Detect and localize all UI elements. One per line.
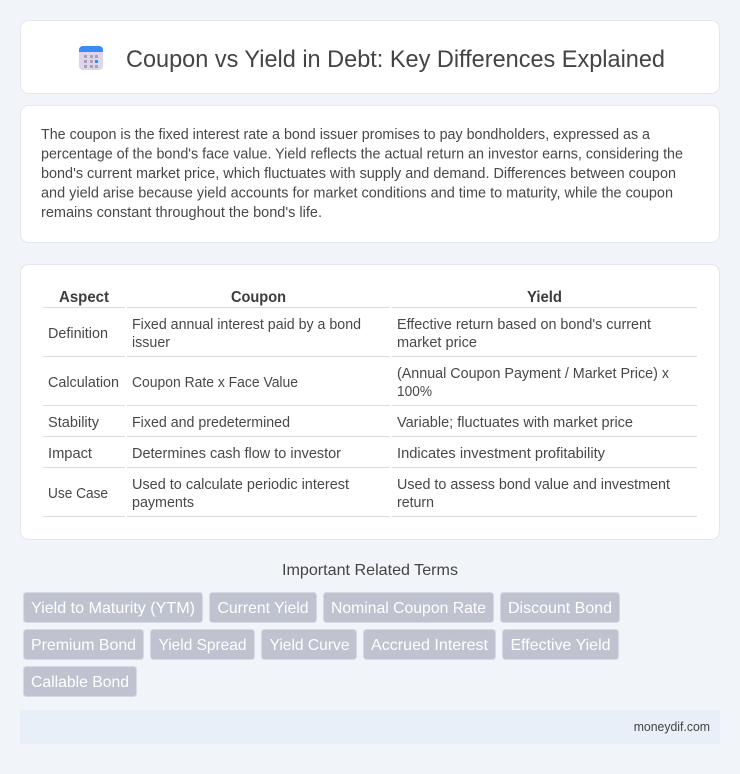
footer: moneydif.com xyxy=(634,719,710,734)
table row: stability xyxy=(43,415,697,437)
related term tags: Nominal Coupon Rate xyxy=(331,600,486,617)
text block: intro paragraph: percentage of the bond's face value. Yield reflects the actual return an investor earns, considering the xyxy=(41,146,683,162)
icon: calendar xyxy=(79,46,103,70)
table row: definition: issuer xyxy=(132,335,170,351)
text block: intro paragraph: remains constant throughout the bond's life. xyxy=(41,205,322,221)
table row: definition xyxy=(43,317,697,357)
table row: calculation xyxy=(43,366,697,406)
table row: use case xyxy=(43,477,697,517)
text block: intro paragraph: The coupon is the fixed interest rate a bond issuer promises to pay bondholders, expressed as a xyxy=(41,127,650,143)
table header: Aspect xyxy=(59,289,109,306)
related term tags: Yield to Maturity (YTM) xyxy=(31,600,195,617)
table header xyxy=(43,289,697,308)
table row: use case: return xyxy=(397,495,434,511)
table header: Yield xyxy=(527,289,562,306)
panel: intro text xyxy=(20,106,720,242)
text block: intro paragraph: bond's current market price, which fluctuates with supply and demand. Differences between coupon xyxy=(41,166,676,182)
table row: use case: Used to calculate periodic interest xyxy=(132,477,349,493)
panel: header xyxy=(20,20,720,94)
table row: calculation: Coupon Rate x Face Value xyxy=(132,375,298,391)
related term tags: Current Yield xyxy=(218,600,308,617)
table row: stability: Fixed and predetermined xyxy=(132,415,290,431)
table row: impact: Impact xyxy=(48,446,92,462)
related term tags: Accrued Interest xyxy=(371,637,489,654)
panel: comparison table xyxy=(20,264,720,540)
table header: Coupon xyxy=(231,289,286,306)
related term tags: Discount Bond xyxy=(508,600,612,617)
table row: impact: Determines cash flow to investor xyxy=(132,446,341,462)
related term tags: Effective Yield xyxy=(510,637,610,654)
table row: calculation: (Annual Coupon Payment / Market Price) x xyxy=(397,366,670,382)
table row: stability: Stability xyxy=(48,415,100,431)
text block: intro paragraph xyxy=(41,127,683,221)
related term tags: Yield Curve xyxy=(270,637,350,654)
footer xyxy=(20,710,720,744)
heading: related terms: Important Related Terms xyxy=(282,562,458,579)
table row: definition: market price xyxy=(397,335,477,351)
table row: calculation: Calculation xyxy=(48,375,119,391)
table row: use case: Used to assess bond value and investment xyxy=(397,477,670,493)
table row: use case: Use Case xyxy=(48,486,108,502)
related term tags: Premium Bond xyxy=(31,637,136,654)
table row: definition: Effective return based on bond's current xyxy=(397,317,651,333)
table row: calculation: 100% xyxy=(397,384,432,400)
related term tags xyxy=(24,592,620,696)
table row: stability: Variable; fluctuates with market price xyxy=(397,415,633,431)
table row: impact xyxy=(43,446,697,468)
related term tags: Callable Bond xyxy=(31,674,129,691)
table row: use case: payments xyxy=(132,495,194,511)
table row: definition: Definition xyxy=(48,326,108,342)
text block: intro paragraph: and yield arise because yield accounts for market conditions and time to maturity, while the coupon xyxy=(41,186,673,202)
title: Coupon vs Yield in Debt: Key Differences Explained xyxy=(126,46,665,73)
related term tags: Yield Spread xyxy=(158,637,246,654)
table row: definition: Fixed annual interest paid by a bond xyxy=(132,317,361,333)
table row: impact: Indicates investment profitability xyxy=(397,446,606,462)
